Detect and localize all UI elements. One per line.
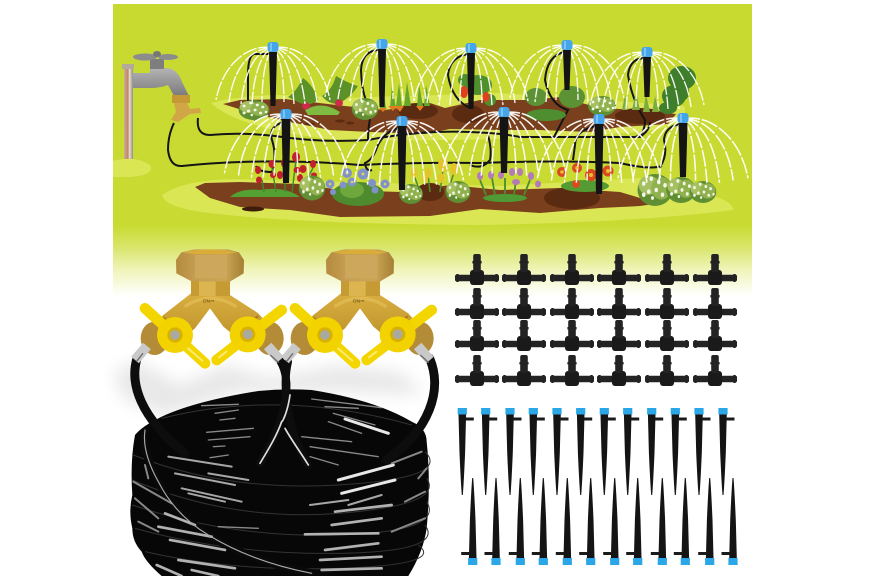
red tulips [230,152,317,197]
lower row plants [230,152,716,206]
product: sprinkler stakes, tips up [461,478,738,565]
brass splitter valve, right: ON➙ [353,298,364,304]
yellow tulips [410,158,458,192]
illustration: garden irrigation scene [113,39,748,225]
brass splitter valve, left [135,249,284,363]
herbs [525,86,585,121]
upper soil bed [223,97,676,134]
icon: garden tap [122,51,201,159]
product: T connectors grid [455,254,737,386]
drip tubing [168,50,681,172]
green onions [622,92,659,112]
hoses rising to valves [135,358,435,465]
soft shadow [113,360,425,415]
brass splitter valve, left: ON➙ [203,298,214,304]
cucumber vine [659,66,696,114]
product: sprinkler stakes, tips down [458,408,734,495]
beet leaves and radishes [288,76,358,115]
lower row spray stakes [224,107,748,194]
flowering shrubs [638,174,716,206]
soil mounds and holes [242,103,665,212]
tomato plant [458,74,496,106]
brass splitter valve, right [285,249,434,363]
upper row spray stakes [216,39,704,109]
upper row plants [239,66,696,121]
ground halos [113,93,733,225]
product: hose coil with brass splitters [113,249,435,576]
carrot tops [379,82,430,112]
lower soil bed [195,182,660,217]
coiled black tubing [130,389,430,576]
purple crocus [477,168,541,202]
green background panel [113,4,752,296]
blue flowers [326,168,390,206]
red daisies [557,163,614,192]
